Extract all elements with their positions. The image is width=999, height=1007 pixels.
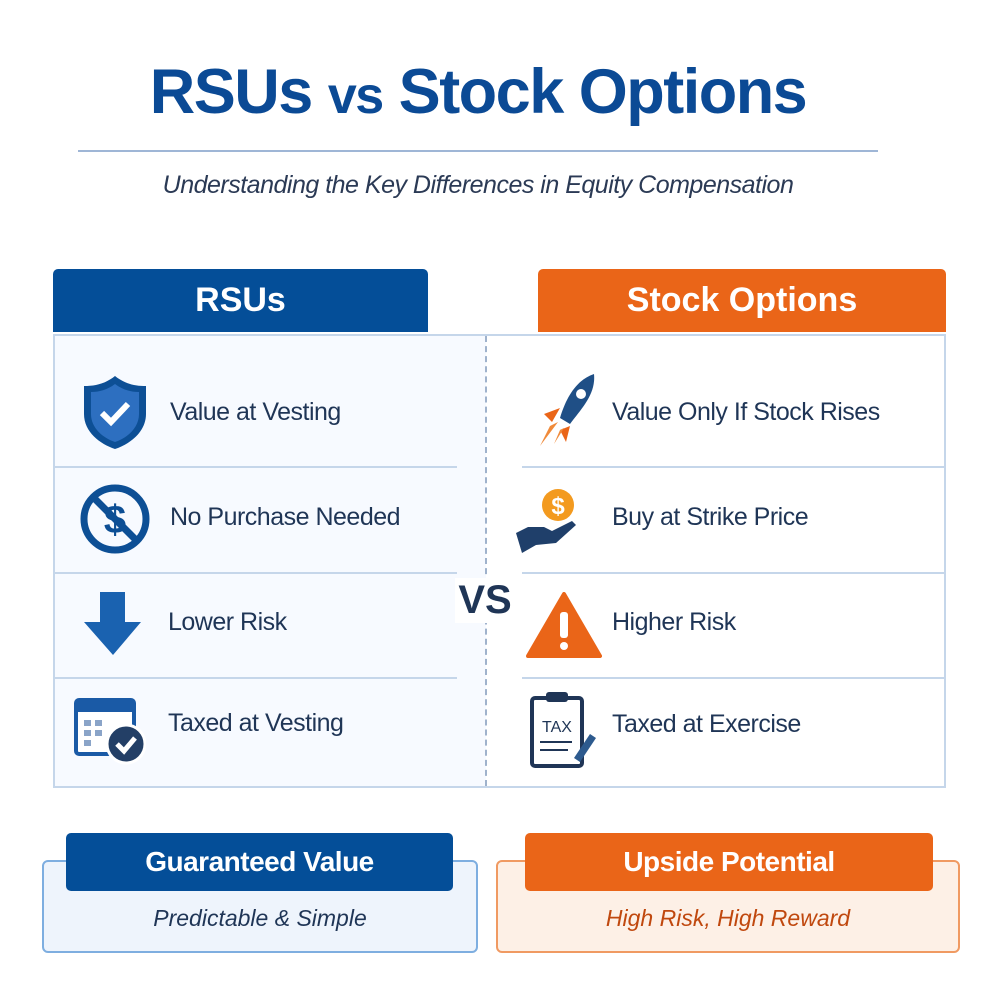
text: Value at Vesting: Value at Vesting [170,398,341,426]
icon: tax clipboard: TAX [542,719,572,736]
text: Lower Risk: Lower Risk [168,608,287,636]
subtitle: Understanding the Key Differences in Equity Compensation [163,171,793,199]
panel: comparison table [53,334,946,788]
text: No Purchase Needed: No Purchase Needed [170,503,400,531]
icon: no dollar [80,484,150,554]
icon: warning [526,592,602,658]
header: Stock Options [538,269,946,332]
text: Value Only If Stock Rises: Value Only If Stock Rises [612,398,880,426]
icon: tax clipboard [530,692,596,768]
callout: Guaranteed Value [42,833,478,953]
title: RSUs vs Stock Options [150,57,806,127]
icon: calendar check [74,698,144,762]
callout: Guaranteed Value: Predictable & Simple [153,905,367,931]
header: RSUs: RSUs [195,281,286,319]
icon: shield [84,376,146,449]
icon: rocket [540,374,594,446]
text: Taxed at Vesting: Taxed at Vesting [168,709,343,737]
callout: Upside Potential: Upside Potential [623,846,835,877]
text: Taxed at Exercise: Taxed at Exercise [612,710,801,738]
callout: Guaranteed Value: Guaranteed Value [145,846,374,877]
icon: hand with coin [516,489,576,553]
callout: Upside Potential [496,833,960,953]
text: Higher Risk: Higher Risk [612,608,736,636]
callout: Upside Potential: High Risk, High Reward [606,905,850,931]
icon: no dollar: $ [104,498,126,542]
VS label: VS [458,578,512,622]
text: Buy at Strike Price: Buy at Strike Price [612,503,808,531]
icon: down arrow [84,592,141,655]
icon: hand with coin: $ [551,493,565,520]
header: Stock Options: Stock Options [627,281,857,319]
header: RSUs [53,269,428,332]
